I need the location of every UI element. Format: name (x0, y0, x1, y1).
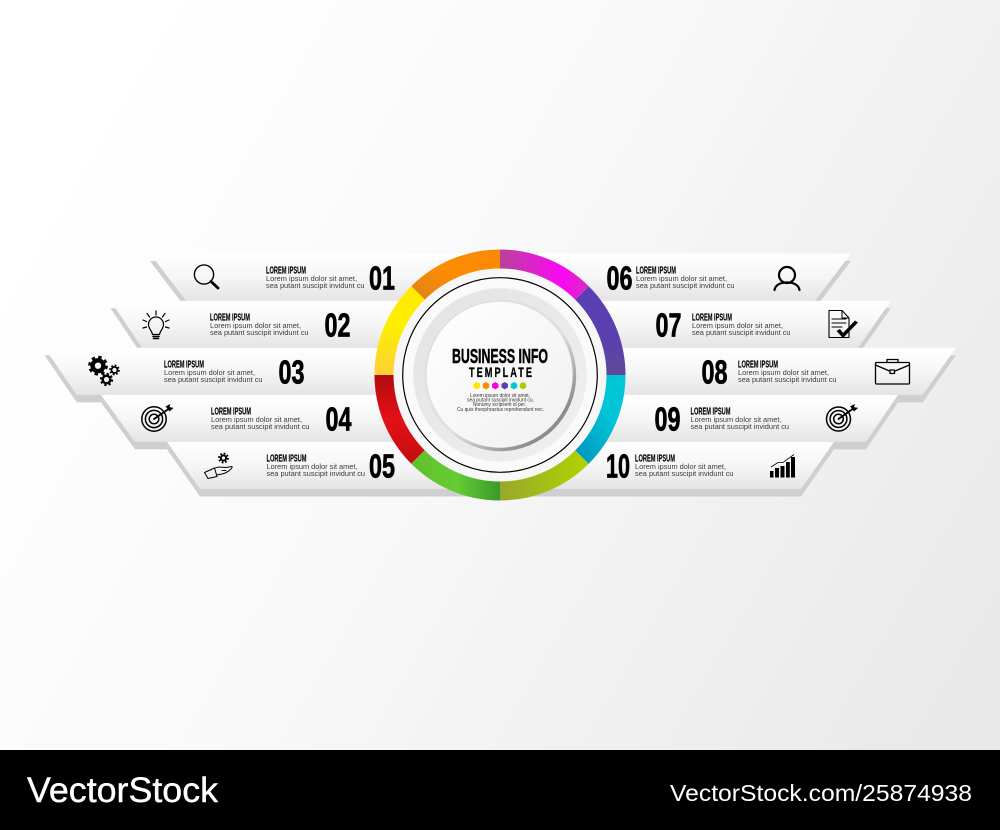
item 01 text: sea putant suscipit invidunt cu (266, 281, 364, 290)
band row 3 (44, 348, 956, 402)
centre body text: sea putant suscipit invidunt cu. (467, 398, 534, 404)
item 02 text (210, 306, 350, 344)
panel: stacked bands (44, 254, 956, 496)
icon: document with check (829, 310, 858, 338)
band row 5 (167, 442, 834, 496)
band row 2 (110, 301, 891, 355)
item 08 text (702, 354, 836, 390)
icon: bar chart (770, 454, 795, 478)
central disc (394, 268, 606, 482)
icon: gears (90, 357, 119, 385)
item 08 text: Lorem ipsum dolor sit amet, (738, 368, 829, 377)
footer bar (0, 750, 1000, 830)
icon: target left (142, 404, 173, 431)
item 03 text (164, 354, 304, 390)
item 06 text: Lorem ipsum dolor sit amet, (636, 274, 727, 283)
item 10 text: 10 (606, 448, 630, 484)
item 03 text: LOREM IPSUM (164, 360, 204, 370)
footer bar: VectorStock (27, 770, 218, 810)
centre heading: TEMPLATE (469, 366, 532, 381)
item 04 text: sea putant suscipit invidunt cu (211, 422, 310, 431)
item 08 text: sea putant suscipit invidunt cu (738, 375, 836, 384)
item 06 text: sea putant suscipit invidunt cu (636, 281, 734, 290)
item 10 text: sea putant suscipit invidunt cu (635, 469, 734, 478)
item 02 text: sea putant suscipit invidunt cu (210, 328, 308, 337)
icon: hand with gear (204, 454, 232, 478)
item 03 text: sea putant suscipit invidunt cu (164, 375, 262, 384)
colour ring (374, 250, 626, 500)
item 01 text: Lorem ipsum dolor sit amet, (266, 274, 357, 283)
item 10 text: LOREM IPSUM (635, 454, 675, 464)
icon: person (774, 267, 800, 290)
item 10 text: Lorem ipsum dolor sit amet, (635, 462, 726, 471)
centre body text: Cu quis theophrastus reprehendunt nec. (457, 407, 544, 413)
band row 4 (101, 395, 898, 449)
item 09 text: LOREM IPSUM (690, 406, 730, 418)
item 06 text: 06 (606, 260, 632, 296)
item 07 text: sea putant suscipit invidunt cu (692, 328, 790, 337)
centre body text: Nonumy scripserit id per. (473, 402, 526, 408)
item 02 text: 02 (324, 306, 350, 344)
icon: target right (826, 404, 858, 431)
item 09 text (654, 400, 789, 438)
item 02 text: LOREM IPSUM (210, 312, 250, 324)
item 07 text: 07 (656, 306, 682, 344)
item 07 text: Lorem ipsum dolor sit amet, (692, 321, 783, 330)
icon: briefcase (876, 360, 910, 384)
item 04 text: 04 (326, 400, 352, 438)
icon: light bulb (143, 311, 169, 338)
centre heading (452, 345, 548, 381)
icon: magnifying glass (194, 265, 218, 288)
item 06 text: LOREM IPSUM (636, 266, 676, 276)
item 09 text: sea putant suscipit invidunt cu (690, 422, 789, 431)
item 05 text: LOREM IPSUM (266, 454, 306, 464)
item 08 text: LOREM IPSUM (738, 360, 778, 370)
item 01 text: LOREM IPSUM (266, 266, 306, 276)
item 01 text: 01 (369, 260, 395, 296)
item 04 text: Lorem ipsum dolor sit amet, (211, 415, 302, 424)
item 04 text: LOREM IPSUM (211, 406, 251, 418)
item 03 text: Lorem ipsum dolor sit amet, (164, 368, 255, 377)
item 05 text: Lorem ipsum dolor sit amet, (266, 462, 358, 471)
item 05 text (266, 448, 395, 484)
item 09 text: Lorem ipsum dolor sit amet, (690, 415, 782, 424)
item 03 text: 03 (278, 354, 304, 390)
band row 1 (150, 254, 851, 308)
item 04 text (211, 400, 352, 438)
footer bar: VectorStock.com/25874938 (670, 780, 972, 806)
item 05 text: 05 (369, 448, 395, 484)
item 05 text: sea putant suscipit invidunt cu (266, 469, 365, 478)
item 08 text: 08 (702, 354, 728, 390)
item 07 text: LOREM IPSUM (692, 312, 732, 324)
centre body text (457, 393, 544, 413)
centre heading: BUSINESS INFO (452, 345, 548, 368)
item 01 text (266, 260, 395, 296)
item 09 text: 09 (654, 400, 680, 438)
item 07 text (656, 306, 790, 344)
centre body text: Lorem ipsum dolor sit amet, (470, 393, 530, 399)
colour hexagon dots (474, 382, 526, 389)
item 06 text (606, 260, 734, 296)
item 10 text (606, 448, 734, 484)
item 02 text: Lorem ipsum dolor sit amet, (210, 321, 301, 330)
